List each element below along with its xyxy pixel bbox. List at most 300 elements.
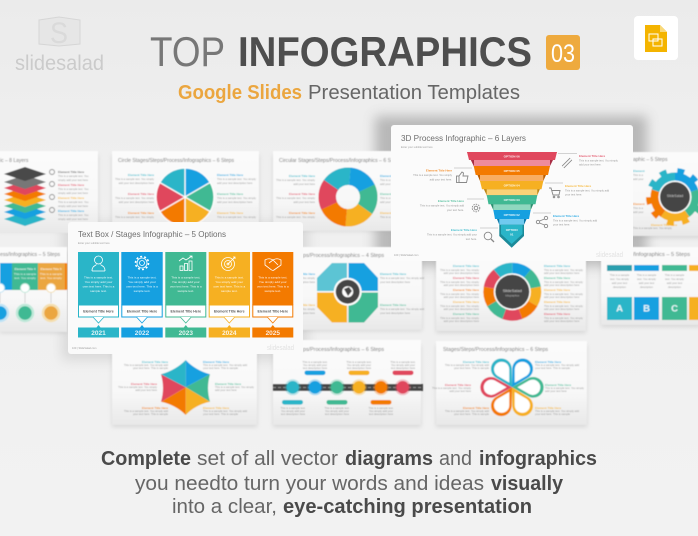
- panel: 4 steps octagon: Element Title Here: [380, 303, 406, 307]
- panel: 5 steps left: This is a sample: [14, 272, 36, 276]
- panel: circular puzzle ring: This is a sample text. You simply: [440, 304, 480, 308]
- funnel chart: OPTION: [506, 228, 518, 232]
- panel: A B C boxes: text. You simply: [665, 277, 684, 281]
- label: element 2: your text here.: [553, 222, 570, 226]
- panel: circular puzzle ring: Element Title Here: [453, 300, 479, 304]
- logo: slidesalad: S: [50, 17, 68, 50]
- panel: timeline 6 steps: This is a sample text.: [346, 360, 372, 364]
- funnel chart: OPTION 04: [504, 184, 520, 188]
- panel: text box stages 5 options: slidesalad: [267, 345, 294, 352]
- column 2024: sample text.: [221, 289, 238, 293]
- panel: circle stages 6 steps: Element Title Here: [217, 173, 243, 177]
- panel: 4 steps octagon: description here: [296, 280, 316, 284]
- panel: flower 6 steps: Stages/Steps/Process/Infographics – 6 Steps: [443, 347, 549, 353]
- panel: 8 layers slide: Element Title Here: [58, 170, 84, 174]
- panel: circle stages 6 steps: Element Title Here: [128, 211, 154, 215]
- panel: circle stages 6 steps: Element Title Here: [128, 173, 154, 177]
- label: element 1: text here.: [466, 237, 477, 241]
- icon: google slides: [634, 16, 678, 60]
- panel: hexagon 6 steps: your text here. This is sample: [203, 366, 239, 370]
- panel: circular puzzle ring: This is a sample text. You simply: [440, 268, 480, 272]
- panel: flower 6 steps: This is a sample text. You simply add: [445, 409, 489, 413]
- panel: flower 6 steps: add your text here: [449, 389, 471, 393]
- title: TOP: [150, 28, 225, 75]
- panel: A B C boxes: description: [613, 285, 627, 289]
- panel: timeline 6 steps: ps/Process/Infographics – 6 Steps: [303, 347, 385, 353]
- panel: 4 steps octagon: your text description here: [380, 280, 411, 284]
- panel: gear 5 steps: add your: [633, 210, 644, 214]
- panel: circle stages 6 steps: add your text description here: [119, 181, 155, 185]
- panel: circular stages 6 steps: This is a sam: [380, 196, 397, 200]
- panel: 8 layers slide: simply add your text here: [58, 204, 89, 208]
- panel: 8 layers slide: Element Title Here: [58, 209, 84, 213]
- panel: 4 steps octagon: Title Here: [301, 303, 315, 307]
- layered stack chart: [4, 167, 46, 226]
- panel: circular stages 6 steps: add your text: [380, 200, 396, 204]
- panel: 5 steps left: ess/Infographics – 5 Steps: [0, 252, 60, 258]
- panel: flower 6 steps: This is a sample text. You simply: [545, 386, 584, 390]
- column 2023: own text here. This is a: [170, 284, 202, 288]
- panel: circular puzzle ring: add your text description here: [444, 295, 480, 299]
- panel: circle stages 6 steps: This is a sample text. You simply: [217, 177, 256, 181]
- panel: A B C boxes: add your text: [667, 281, 683, 285]
- bottom text: set of all vector: [197, 447, 338, 470]
- panel: 5 steps left: Element Title 5: [40, 267, 62, 271]
- road timeline: [273, 379, 423, 395]
- panel: circle stages 6 steps: This is a sample text. You simply: [217, 215, 256, 219]
- panel: hexagon 6 steps: This is a sample text. You simply add: [203, 363, 248, 367]
- column 2021: [78, 252, 119, 338]
- panel: timeline 6 steps: You simply add your: [281, 409, 305, 413]
- panel: timeline 6 steps: This is a sample text.: [324, 406, 350, 410]
- label: element 2: Element Title Here: [553, 214, 579, 218]
- panel: circular puzzle ring: This is a sample text. You simply: [440, 280, 480, 284]
- panel: circular stages 6 steps: Circular Stages/Steps/Process/Infographics – 6 S: [279, 158, 392, 164]
- panel: flower 6 steps: your text here. This is sample: [454, 412, 489, 416]
- column 2024: You simply add your: [215, 280, 243, 284]
- panel: text box stages 5 options: 100 | SlideSalad.com: [72, 346, 96, 350]
- panel: timeline 6 steps: You simply add your: [369, 409, 393, 413]
- label: element 5: [413, 168, 453, 182]
- panel: hexagon 6 steps: your text here. This is sample: [203, 412, 239, 416]
- panel: gear 5 steps: This is a: [633, 206, 644, 210]
- panel: timeline 6 steps: [273, 340, 423, 425]
- funnel chart: OPTION 05: [504, 169, 520, 173]
- panel: circular puzzle ring: Element Title Here: [544, 312, 570, 316]
- column 2023: You simply add your: [172, 280, 200, 284]
- pie chart: [156, 168, 214, 226]
- panel: 8 layers slide: Element Title Here: [58, 183, 84, 187]
- panel: gear 5 steps: [620, 152, 698, 236]
- panel: timeline 6 steps: You simply add your: [391, 363, 415, 367]
- panel: hexagon 6 steps: Element Title Here: [203, 360, 229, 364]
- panel: circular puzzle ring: add your text description here: [544, 295, 580, 299]
- column 2021: Element Title Here: [83, 310, 114, 314]
- column 2023: Element Title Here: [171, 310, 201, 314]
- panel: circular puzzle ring: This is a sample text. You simply: [544, 316, 583, 320]
- icon: gear: [136, 256, 148, 270]
- funnel chart: OPTION 03: [504, 198, 520, 202]
- panel: circular stages 6 steps: add your text: [380, 182, 396, 186]
- label: element 5: This is a sample text. You simply: [413, 173, 453, 177]
- panel: 4 steps octagon: ps/Process/Infographics – 4 Steps: [303, 253, 385, 259]
- panel: flower 6 steps: This is a sample text. You simply add: [445, 363, 489, 367]
- panel: A B C boxes: C: [671, 304, 678, 314]
- column 2025: [252, 252, 293, 338]
- icon: thumbs up: [456, 172, 468, 182]
- panel: circle stages 6 steps: Circle Stages/Steps/Process/Infographics – 6 Steps: [118, 158, 234, 164]
- column 2022: sample text.: [134, 289, 150, 293]
- label: element 4: Element Title Here: [565, 184, 591, 188]
- panel: hexagon 6 steps: add your text here: [135, 388, 157, 392]
- icon: share: [536, 216, 548, 228]
- column 2024: 2024: [222, 330, 237, 337]
- column 2025: You simply add your: [259, 280, 287, 284]
- panel: 5 steps left: [0, 247, 67, 332]
- panel: gear 5 steps: Element: [633, 202, 645, 206]
- subtitle: [178, 82, 520, 104]
- label: element 2: [553, 214, 598, 226]
- panel: circular puzzle ring: This is a sample text. You simply: [544, 280, 583, 284]
- column 2021: This is a sample text.: [84, 276, 113, 280]
- icon: target: [222, 257, 235, 270]
- panel: A B C boxes: add your text: [612, 281, 628, 285]
- panel: circular puzzle ring: Element Title Here: [544, 264, 570, 268]
- panel: flower 6 steps: your text here. This is sample: [535, 366, 571, 370]
- panel: flower 6 steps: Element Title Here: [545, 383, 571, 387]
- bottom text: diagrams: [345, 447, 433, 470]
- panel: circular stages 6 steps: Element Title: [380, 174, 399, 178]
- panel: A B C boxes: description: [640, 285, 654, 289]
- panel: 5 steps left: text. You simply: [40, 276, 62, 280]
- panel: hexagon 6 steps: This is a sample text. You simply add: [203, 409, 248, 413]
- panel: circular puzzle ring: add your text description here: [544, 271, 580, 275]
- panel: timeline 6 steps: text description here: [325, 412, 350, 416]
- bottom text: and: [439, 447, 472, 470]
- badge: 03: [546, 35, 580, 70]
- panel: timeline 6 steps: text description here: [281, 412, 306, 416]
- panel: circular puzzle ring: This is a sample text. You simply: [440, 292, 480, 296]
- label: element 1: [427, 228, 477, 241]
- label: element 1: This is a sample text. You simply add your: [427, 232, 477, 236]
- panel: hexagon 6 steps: add your text here: [215, 388, 237, 392]
- panel: circular puzzle ring: Element Title Here: [453, 276, 479, 280]
- panel: circle stages 6 steps: add your text description here: [217, 200, 253, 204]
- panel: 5 steps left: text. You simply: [14, 276, 36, 280]
- panel: A B C boxes: This is a sample: [610, 273, 630, 277]
- card shadows and gutter bands: [0, 116, 698, 427]
- panel: circle stages 6 steps: This is a sample text. You simply: [115, 177, 155, 181]
- panel: 4 steps octagon: Element Title Here: [380, 272, 406, 276]
- panel: timeline 6 steps: You simply add your: [303, 363, 327, 367]
- bottom text: infographics: [479, 447, 597, 470]
- panel: circular stages 6 steps: This is a sample text. You simply: [276, 215, 316, 219]
- funnel chart: OPTION 06: [504, 154, 520, 158]
- panel: circular puzzle ring: Element Title Here: [453, 312, 479, 316]
- logo: slidesalad: slidesalad: [15, 52, 104, 75]
- panel: 4 steps octagon: your text description here: [380, 311, 411, 315]
- subtitle: Google Slides: [178, 82, 302, 104]
- panel: circular puzzle ring: This is a sample text. You simply: [544, 304, 583, 308]
- label: element 2: This is a sample text. You simply add: [553, 218, 598, 222]
- panel: circle stages 6 steps: add your text description here: [119, 200, 155, 204]
- panel: circular puzzle ring: Element Title Here: [453, 288, 479, 292]
- panel: gear 5 steps: This is a sample text. You simply: [633, 226, 672, 230]
- panel: circular puzzle ring: This is a sample text. You simply: [544, 268, 583, 272]
- panel: A B C boxes: B: [643, 304, 650, 314]
- panel: circular puzzle ring: add your text description here: [444, 283, 480, 287]
- label: element 6: [579, 154, 618, 166]
- column 2025: sample text.: [264, 289, 281, 293]
- panel: circular stages 6 steps: [273, 151, 399, 231]
- label: element 1: Element Title Here: [451, 228, 477, 232]
- funnel chart: 01: [510, 232, 514, 236]
- panel: 8 layers slide: ic – 8 Layers: [0, 158, 29, 164]
- label: element 5: add your text here.: [430, 178, 452, 182]
- column 2023: [165, 252, 206, 338]
- panel: flower 6 steps: Element Title Here: [535, 360, 561, 364]
- panel: gear 5 steps: add your: [633, 177, 644, 181]
- panel: 4 steps octagon: description here: [296, 311, 316, 315]
- panel: flower 6 steps: This is a sample text. You simply add: [535, 363, 580, 367]
- panel: hexagon 6 steps: Element Title Here: [203, 406, 229, 410]
- column 2024: own text here. This is a: [213, 284, 245, 288]
- panel: circular puzzle ring: add your text description here: [544, 283, 580, 287]
- panel: 3D process infographic 6 layers: [391, 125, 633, 261]
- panel: A B C boxes: This is a sample: [637, 273, 657, 277]
- bottom text: into a clear,: [172, 495, 277, 518]
- panel: 3D process infographic 6 layers: 3D Process Infographic – 6 Layers: [401, 134, 526, 143]
- panel: 5 steps left: This is a sample: [40, 272, 62, 276]
- label: element 4: This is a sample text. You simply add: [565, 188, 610, 192]
- column 2022: 2022: [135, 330, 150, 337]
- column 2023: 2023: [179, 330, 193, 337]
- panel: circle stages 6 steps: This is a sample text. You simply: [217, 196, 256, 200]
- label: element 3: [420, 199, 464, 212]
- panel: text box stages 5 options: [68, 222, 303, 354]
- panel: hexagon 6 steps: your text here. This is sample: [133, 366, 168, 370]
- panel: 5 steps left: Element Title 4: [14, 267, 36, 271]
- panel: gear 5 steps: This is a: [633, 173, 644, 177]
- panel: timeline 6 steps: You simply add your: [325, 409, 349, 413]
- icon: settings: [472, 204, 480, 212]
- panel: circular stages 6 steps: This is a sam: [380, 178, 397, 182]
- flower diagram: [480, 355, 544, 420]
- panel: circle stages 6 steps: This is a sample text. You simply: [115, 196, 155, 200]
- panel: timeline 6 steps: This is a sample text.: [302, 360, 328, 364]
- column 2025: This is a sample text.: [258, 276, 287, 280]
- panel: flower 6 steps: Element Title Here: [463, 406, 489, 410]
- panel: 4 steps octagon: Title Here: [301, 272, 315, 276]
- label: element 4: [565, 184, 610, 196]
- logo: slidesalad: [15, 17, 104, 75]
- panel: circle stages 6 steps: add your text description here: [217, 181, 253, 185]
- panel: A B C boxes: text. You simply: [610, 277, 629, 281]
- label: element 6: add your text here.: [579, 162, 602, 166]
- panel: text box stages 5 options: Enter your subtitle text here: [78, 241, 110, 245]
- panel: A B C boxes: A: [616, 304, 623, 314]
- panel: circle stages 6 steps: [112, 151, 259, 229]
- panel: timeline 6 steps: text description here: [369, 412, 394, 416]
- gear diagram: [638, 160, 698, 234]
- column 2025: Element Title Here: [258, 310, 288, 314]
- panel: circular puzzle ring: Element Title Here: [544, 300, 570, 304]
- panel: flower 6 steps: Element Title Here: [445, 383, 471, 387]
- column 2022: This is a sample text.: [127, 276, 157, 280]
- column 2025: own text here. This is a: [257, 284, 289, 288]
- panel: circle stages 6 steps: Element Title Here: [217, 211, 243, 215]
- panel: 3D process infographic 6 layers: 100 | SlideSalad.com: [394, 253, 418, 257]
- icon: growth chart: [179, 256, 192, 270]
- icon: user: [92, 256, 105, 271]
- panel: circular stages 6 steps: Element Title: [380, 192, 399, 196]
- octagon diagram: [317, 263, 378, 322]
- panel: hexagon 6 steps: Element Title Here: [142, 406, 168, 410]
- column 2023: This is a sample text.: [171, 276, 200, 280]
- panel: circular puzzle ring: [436, 250, 586, 331]
- column 2021: You simply add your: [85, 280, 112, 284]
- panel: gear 5 steps: SlideSalad: [667, 194, 683, 198]
- column 2025: 2025: [266, 330, 280, 337]
- ring diagram: [480, 259, 545, 324]
- panel: hexagon 6 steps: Element Title Here: [142, 360, 168, 364]
- panel: 8 layers slide: simply add your text here: [58, 178, 89, 182]
- panel: circular stages 6 steps: Element Title Here: [289, 211, 315, 215]
- bottom text: Complete: [101, 447, 191, 470]
- panel: circular stages 6 steps: Element Title: [380, 211, 399, 215]
- panel: 8 layers slide: This is a sample text. You: [58, 200, 89, 204]
- panel: circular puzzle ring: This is a sample text. You simply: [440, 316, 480, 320]
- panel: timeline 6 steps: This is a sample text.: [280, 406, 306, 410]
- label: element 6: Element Title Here: [579, 154, 605, 158]
- panel: timeline 6 steps: This is a sample text.: [390, 360, 416, 364]
- panel: gear 5 steps: Element: [633, 169, 645, 173]
- panel: hexagon 6 steps: Element Title Here: [215, 382, 241, 386]
- label: element 3: Element Title Here: [438, 199, 464, 203]
- panel: circle stages 6 steps: Element Title Here: [128, 192, 154, 196]
- panel: flower 6 steps: This is a sample text. You simply: [432, 386, 472, 390]
- panel: circular stages 6 steps: This is a sam: [380, 215, 397, 219]
- panel: A B C boxes: This is a sample: [665, 273, 685, 277]
- panel: flower 6 steps: Element Title Here: [535, 406, 561, 410]
- panel: timeline 6 steps: text description here: [303, 366, 328, 370]
- panel: flower 6 steps: This is a sample text. You simply add: [535, 409, 580, 413]
- panel: A B C boxes: text. You simply: [637, 277, 656, 281]
- panel: A B C boxes: [601, 247, 698, 325]
- icon: link: [563, 159, 571, 167]
- panel: circular puzzle ring: Infographics: [505, 294, 520, 298]
- donut chart: [319, 168, 377, 226]
- column 2022: own text here. This is a: [126, 284, 158, 288]
- panel: hexagon 6 steps: This is a sample text. You simply: [118, 385, 158, 389]
- icon: cart: [549, 188, 560, 198]
- panel: timeline 6 steps: text description here: [347, 366, 372, 370]
- label: element 3: your text here.: [447, 208, 464, 212]
- panel: flower 6 steps: add your text here: [545, 389, 567, 393]
- panel: 4 steps octagon: This is a sample text. You simply add: [380, 307, 425, 311]
- panel: flower 6 steps: Element Title Here: [463, 360, 489, 364]
- panel: circular puzzle ring: This is a sample text. You simply: [544, 292, 583, 296]
- panel: circular puzzle ring: add your text description here: [444, 271, 480, 275]
- title: INFOGRAPHICS: [238, 28, 532, 75]
- panel: 4 steps octagon: [296, 247, 425, 330]
- panel: 3D process infographic 6 layers: slidesalad: [596, 252, 623, 259]
- label: element 3: This is a sample text. You simply add: [420, 204, 464, 208]
- panel: flower 6 steps: [432, 341, 587, 425]
- panel: timeline 6 steps: text description here: [391, 366, 416, 370]
- panel: circular puzzle ring: Element Title Here: [544, 276, 570, 280]
- panel: 8 layers slide: simply add your text here: [58, 191, 89, 195]
- bottom text: visually: [491, 472, 564, 495]
- bottom text: [101, 447, 597, 518]
- panel: A B C boxes: add your text: [639, 281, 655, 285]
- panel: hexagon 6 steps: [112, 342, 257, 425]
- column 2022: Element Title Here: [127, 310, 157, 314]
- panel: hexagon 6 steps: This is a sample text. You simply add: [124, 363, 168, 367]
- panel: circle stages 6 steps: Element Title Here: [217, 192, 243, 196]
- panel: gear 5 steps: aphic – 5 Steps: [633, 157, 668, 163]
- panel: circular stages 6 steps: This is a sample text. You simply: [276, 178, 316, 182]
- panel: circular stages 6 steps: Element Title Here: [289, 174, 315, 178]
- panel: 8 layers slide: This is a sample text. You: [58, 187, 89, 191]
- panel: gear 5 steps: Element Title Here: [651, 223, 677, 227]
- column 2022: You simply add your: [128, 280, 156, 284]
- panel: flower 6 steps: your text here. This is sample: [535, 412, 571, 416]
- funnel chart: [467, 152, 557, 248]
- hexagon diagram: [161, 360, 210, 415]
- column 2022: [121, 252, 163, 338]
- column 2021: sample text.: [90, 289, 107, 293]
- bottom text: eye-catching presentation: [283, 495, 532, 518]
- panel: circular puzzle ring: Element Title Here: [453, 264, 479, 268]
- panel: circular puzzle ring: add your text description here: [544, 307, 580, 311]
- panel: circular puzzle ring: add your text description here: [544, 319, 580, 323]
- panel: circular puzzle ring: add your text description here: [444, 307, 480, 311]
- panel: A B C boxes: ps/Process/Infographics – 5 Steps: [605, 252, 691, 258]
- panel: 8 layers slide: [0, 151, 98, 233]
- label: element 5: Element Title Here: [426, 168, 452, 172]
- panel: 4 steps octagon: This is a sample text. You simply add: [380, 276, 425, 280]
- label: element 6: This is a sample text. You simply: [579, 158, 618, 162]
- panel: hexagon 6 steps: This is a sample text. You simply: [215, 385, 254, 389]
- panel: timeline 6 steps: This is a sample text.: [368, 406, 394, 410]
- panel: 4 steps octagon: text. You simply: [296, 276, 316, 280]
- panel: circular stages 6 steps: Element Title Here: [289, 192, 315, 196]
- panel: 3D process infographic 6 layers: Enter your subtitle text here: [401, 145, 433, 149]
- bottom text: you needto turn your words and ideas: [135, 472, 484, 495]
- panel: hexagon 6 steps: Element Title Here: [131, 382, 157, 386]
- panel: hexagon 6 steps: your text here. This is sample: [133, 412, 168, 416]
- column 2021: 2021: [91, 330, 106, 337]
- panel: circular stages 6 steps: add your text here: [293, 200, 315, 204]
- panel: 8 layers slide: This is a sample text. You: [58, 174, 89, 178]
- funnel chart: OPTION 02: [504, 213, 520, 217]
- subtitle: Presentation Templates: [308, 82, 520, 104]
- panel: timeline 6 steps: You simply add your: [347, 363, 371, 367]
- panel: circular puzzle ring: Element Title Here: [544, 288, 570, 292]
- panel: circle stages 6 steps: This is a sample text. You simply: [115, 215, 155, 219]
- panel: 8 layers slide: simply add your text here: [58, 217, 89, 221]
- panel: 4 steps octagon: text. You simply: [296, 307, 316, 311]
- panel: circular stages 6 steps: This is a sample text. You simply: [276, 196, 316, 200]
- panel: circular puzzle ring: SlideSalad: [503, 288, 522, 293]
- icon: search: [484, 232, 494, 242]
- column 2024: [209, 252, 250, 338]
- panel: circular puzzle ring: add your text description here: [444, 319, 480, 323]
- panel: circular stages 6 steps: add your text here: [293, 182, 315, 186]
- column 2021: own text here. This is a: [83, 284, 115, 288]
- panel: hexagon 6 steps: This is a sample text. You simply add: [124, 409, 168, 413]
